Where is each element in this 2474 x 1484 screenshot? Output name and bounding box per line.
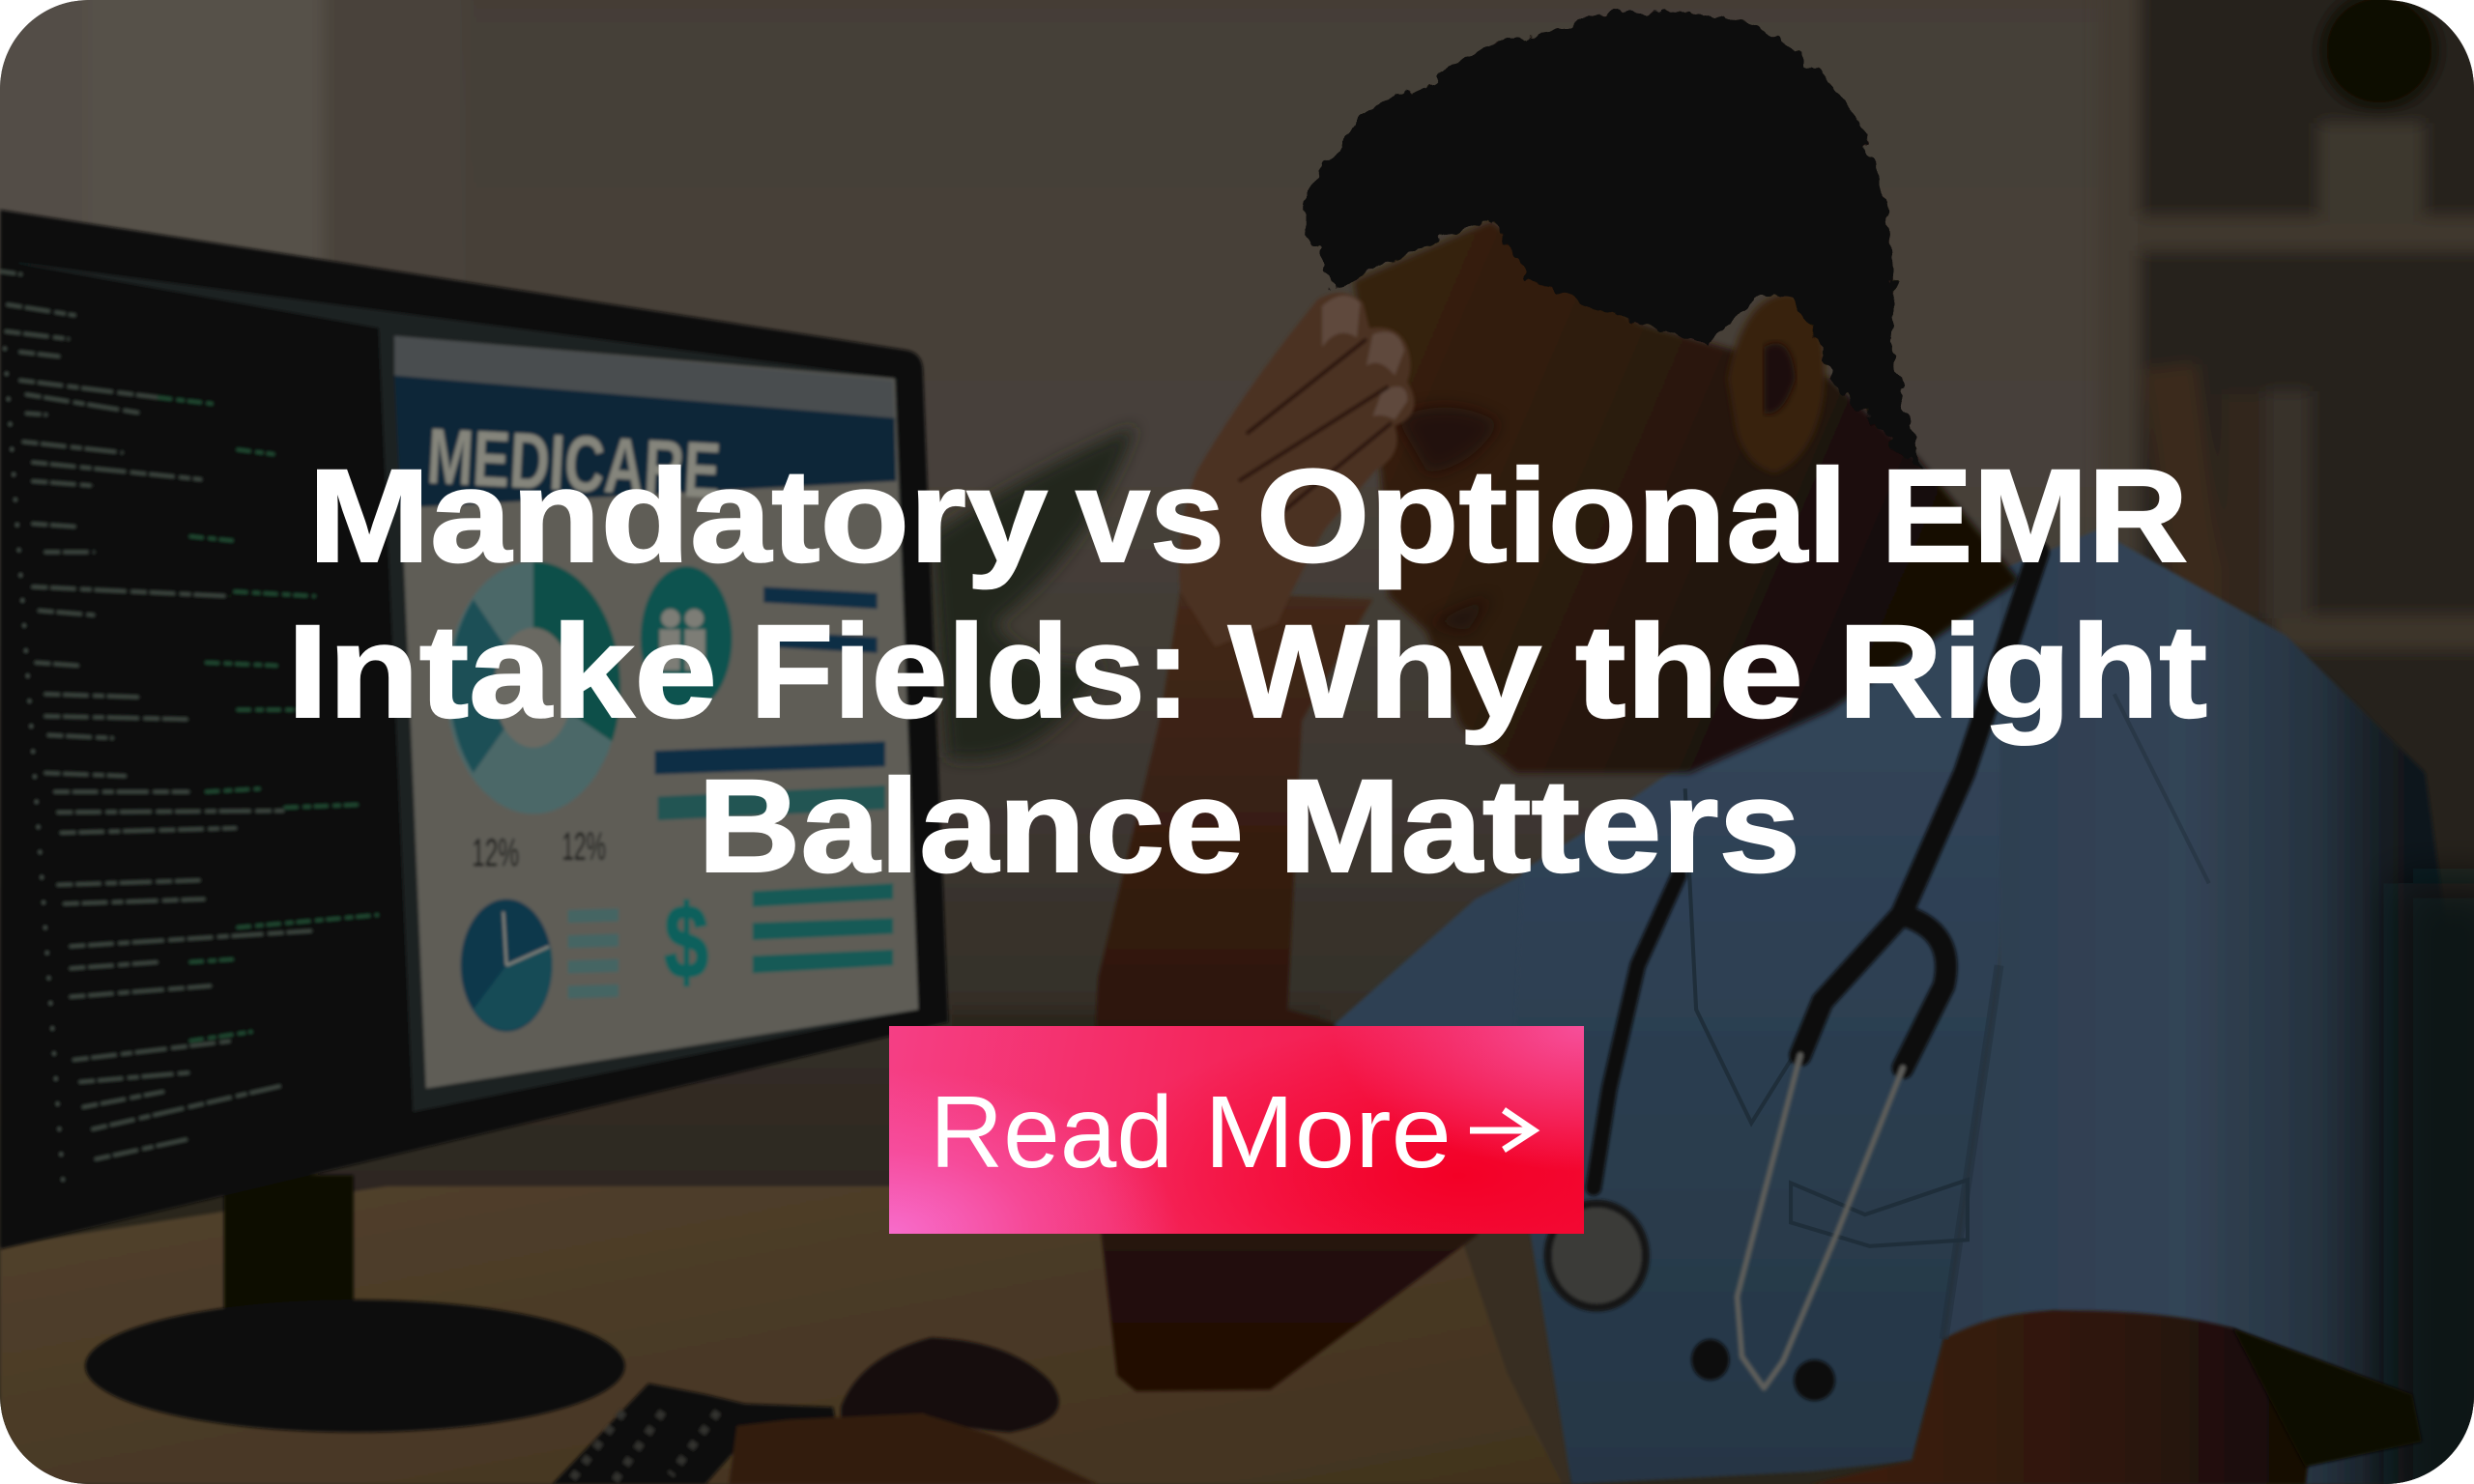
title: Mandatory [308, 442, 1048, 590]
code lines on screen [0, 271, 316, 1159]
scrub sleeve left [1334, 870, 1578, 1104]
title: Optional [1256, 442, 1848, 590]
title: Fields: [750, 598, 1191, 746]
percent labels: 12% [472, 830, 519, 874]
ear [1728, 294, 1825, 473]
scrubs torso [1514, 556, 2035, 1484]
finger lines [1239, 339, 1392, 528]
icon: arrow [1470, 1110, 1534, 1150]
title: Right [1838, 598, 2207, 746]
hair [1303, 12, 1922, 473]
bookshelf [2098, 0, 2474, 1484]
monitor stand [85, 1175, 625, 1432]
dollar sign: $ [664, 883, 708, 1000]
forearm, elbow and upper arm [1090, 591, 1514, 1391]
donut chart [446, 561, 620, 813]
hand on forehead [1179, 293, 1415, 646]
title: vs [1076, 442, 1224, 590]
pie chart [461, 899, 552, 1032]
monitor [0, 210, 948, 1432]
scrub neckline and pocket [1685, 694, 2209, 1339]
neck and face [1354, 221, 2020, 773]
clinician [1090, 12, 2474, 1484]
scrubs sleeve right [1943, 530, 2455, 1484]
percent labels: 12% [561, 824, 606, 869]
percent labels [472, 824, 606, 874]
stethoscope [1548, 552, 2038, 1401]
title: Matters [1279, 753, 1800, 900]
people icon circle [641, 566, 733, 711]
plant [931, 426, 1136, 759]
screen heading: MEDICARE [425, 413, 723, 515]
title: the [1575, 598, 1803, 746]
read more button [889, 1026, 1584, 1234]
title: Why [1228, 598, 1541, 746]
right edge shadow [2399, 883, 2474, 1484]
dashboard panel on screen [394, 336, 918, 1089]
title: Intake [287, 598, 717, 746]
eye brow and nose shadow [1396, 408, 1499, 631]
bar rows [568, 586, 893, 998]
title: EMR [1881, 442, 2188, 590]
keyboard and mouse [552, 1337, 1098, 1484]
button label second word: More [1204, 1075, 1452, 1189]
desk [0, 1186, 1571, 1484]
button label: Read [930, 1075, 1173, 1189]
right forearm in shadow [1810, 1311, 2319, 1484]
title: Balance [698, 753, 1244, 900]
